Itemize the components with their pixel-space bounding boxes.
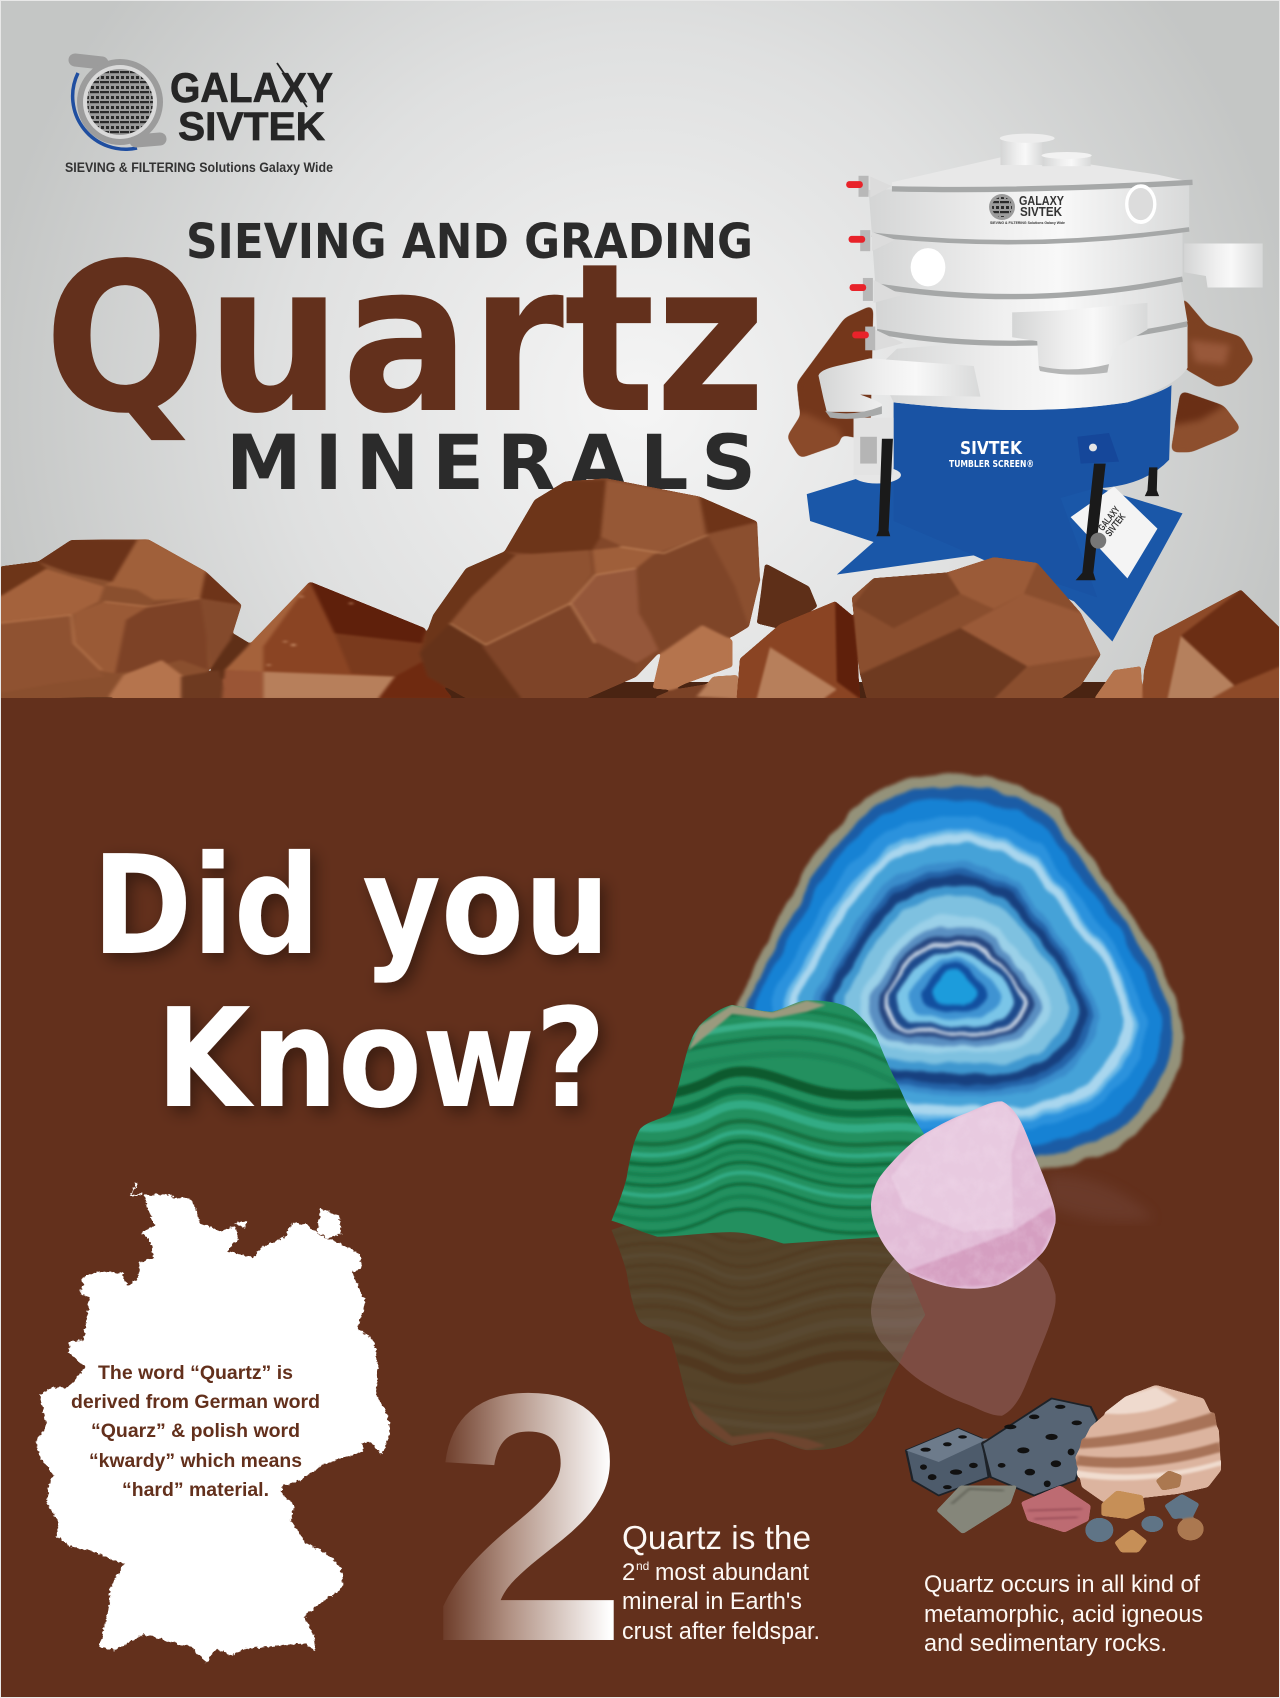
machine section three bbox=[875, 272, 1188, 341]
panel: did you know section background bbox=[0, 698, 1280, 1698]
machine bracket bbox=[1077, 433, 1119, 464]
rock: red pebble bbox=[1021, 1485, 1091, 1532]
rocks behind machine bbox=[787, 295, 1254, 458]
text: word origin: derived from German word bbox=[71, 1391, 320, 1413]
machine motor bbox=[853, 418, 901, 483]
machine label logo: SIVTEK bbox=[1104, 511, 1129, 539]
rock: pebbles and back rock bbox=[653, 563, 817, 698]
rock: left boulder bbox=[0, 539, 241, 698]
machine blue body bbox=[894, 385, 1171, 598]
text: second most abundant: 2 bbox=[622, 1559, 635, 1586]
machine centre duct bbox=[1012, 303, 1147, 372]
rocks: foreground right bbox=[737, 557, 1280, 699]
text: word origin: “hard” material. bbox=[122, 1479, 269, 1501]
mineral: malachite bbox=[600, 989, 944, 1255]
text: word origin bbox=[71, 1362, 320, 1501]
text: rock occurrence: metamorphic, acid igneous bbox=[924, 1601, 1203, 1628]
mineral: blue agate bbox=[735, 773, 1186, 1171]
machine left spout bbox=[818, 358, 980, 412]
rock: grey pebble bbox=[937, 1485, 1017, 1534]
machine inspection ports bbox=[911, 186, 1155, 286]
rock: lava left bbox=[906, 1429, 989, 1496]
mineral reflection: rose quartz bbox=[871, 1258, 1056, 1416]
machine logo small bbox=[989, 193, 1066, 225]
machine lid bbox=[892, 157, 1193, 190]
rock collection illustration bbox=[906, 1385, 1221, 1552]
rock: crystal right bbox=[737, 601, 860, 699]
logo: Galaxy Sivtek bbox=[65, 59, 333, 175]
rock: right crystal bbox=[1142, 590, 1280, 699]
logo: Galaxy Sivtek: SIVTEK bbox=[178, 105, 325, 149]
machine section one bbox=[869, 182, 1189, 241]
machine label logo: GALAXY bbox=[1097, 504, 1123, 533]
heading: did you know bbox=[92, 827, 610, 1139]
machine product name: TUMBLER SCREEN® bbox=[949, 459, 1034, 470]
text: rock occurrence bbox=[924, 1571, 1203, 1657]
machine logo small: GALAXY bbox=[1019, 193, 1064, 208]
machine section two bbox=[872, 230, 1183, 295]
text: second most abundant: mineral in Earth's bbox=[622, 1588, 802, 1615]
mineral reflection: malachite bbox=[600, 1195, 944, 1462]
machine base plate bbox=[807, 467, 1183, 642]
machine label logo bbox=[1085, 504, 1130, 553]
text: word origin: “Quarz” & polish word bbox=[91, 1420, 300, 1442]
text: rock occurrence: and sedimentary rocks. bbox=[924, 1630, 1167, 1657]
heading: Quartz: Quartz bbox=[44, 219, 766, 459]
heading: sieving and grading: SIEVING AND GRADING bbox=[186, 214, 753, 270]
rock: back dark bbox=[211, 633, 250, 680]
agate reflection bbox=[1048, 1175, 1155, 1221]
rock: lava right bbox=[982, 1398, 1097, 1496]
rocks: dark crevice strip bbox=[0, 682, 1110, 698]
rock: banded stone bbox=[1075, 1385, 1221, 1502]
heading: did you know: Did you bbox=[92, 827, 610, 986]
minerals illustration bbox=[600, 773, 1186, 1462]
heading: did you know: Know? bbox=[156, 980, 606, 1139]
rock: big boulder front of machine bbox=[852, 557, 1101, 699]
heading: minerals: MINERALS bbox=[226, 418, 756, 507]
machine clamps bbox=[846, 176, 904, 351]
machine top neck bbox=[1000, 134, 1092, 166]
map: Germany bbox=[37, 1183, 390, 1662]
machine bottom pan bbox=[877, 326, 1188, 410]
rock: small pebbles bbox=[1085, 1470, 1204, 1552]
machine logo small: SIEVING & FILTERING Solutions Galaxy Wide bbox=[990, 220, 1066, 225]
text: second most abundant: most abundant bbox=[655, 1559, 809, 1586]
panel: header background bbox=[0, 0, 1280, 698]
machine product name: SIVTEK bbox=[960, 438, 1023, 459]
text: second most abundant: nd bbox=[636, 1559, 649, 1573]
machine logo small: SIVTEK bbox=[1020, 204, 1063, 219]
text: word origin: “kwardy” which means bbox=[89, 1450, 302, 1472]
rock: crystal bbox=[222, 582, 453, 698]
machine legs bbox=[876, 439, 1159, 580]
text: second most abundant: Quartz is the bbox=[622, 1519, 811, 1556]
rock: large central boulder bbox=[420, 478, 760, 698]
machine: tumbler screen bbox=[807, 134, 1263, 642]
text: second most abundant: crust after feldspar. bbox=[622, 1618, 820, 1645]
text: word origin: The word “Quartz” is bbox=[98, 1362, 293, 1384]
mineral: rose quartz bbox=[868, 1099, 1059, 1292]
text: rock occurrence: Quartz occurs in all kind of bbox=[924, 1571, 1200, 1598]
text: second most abundant bbox=[622, 1519, 820, 1645]
machine right spout bbox=[1184, 244, 1263, 288]
machine product name bbox=[949, 438, 1034, 470]
logo: Galaxy Sivtek: SIEVING & FILTERING Solutions Galaxy Wide bbox=[65, 160, 333, 175]
logo: Galaxy Sivtek: GALAXY bbox=[170, 64, 333, 111]
machine white label bbox=[1071, 487, 1157, 578]
rock: small right pebble bbox=[1094, 666, 1142, 699]
rocks: foreground left and centre bbox=[0, 478, 817, 698]
